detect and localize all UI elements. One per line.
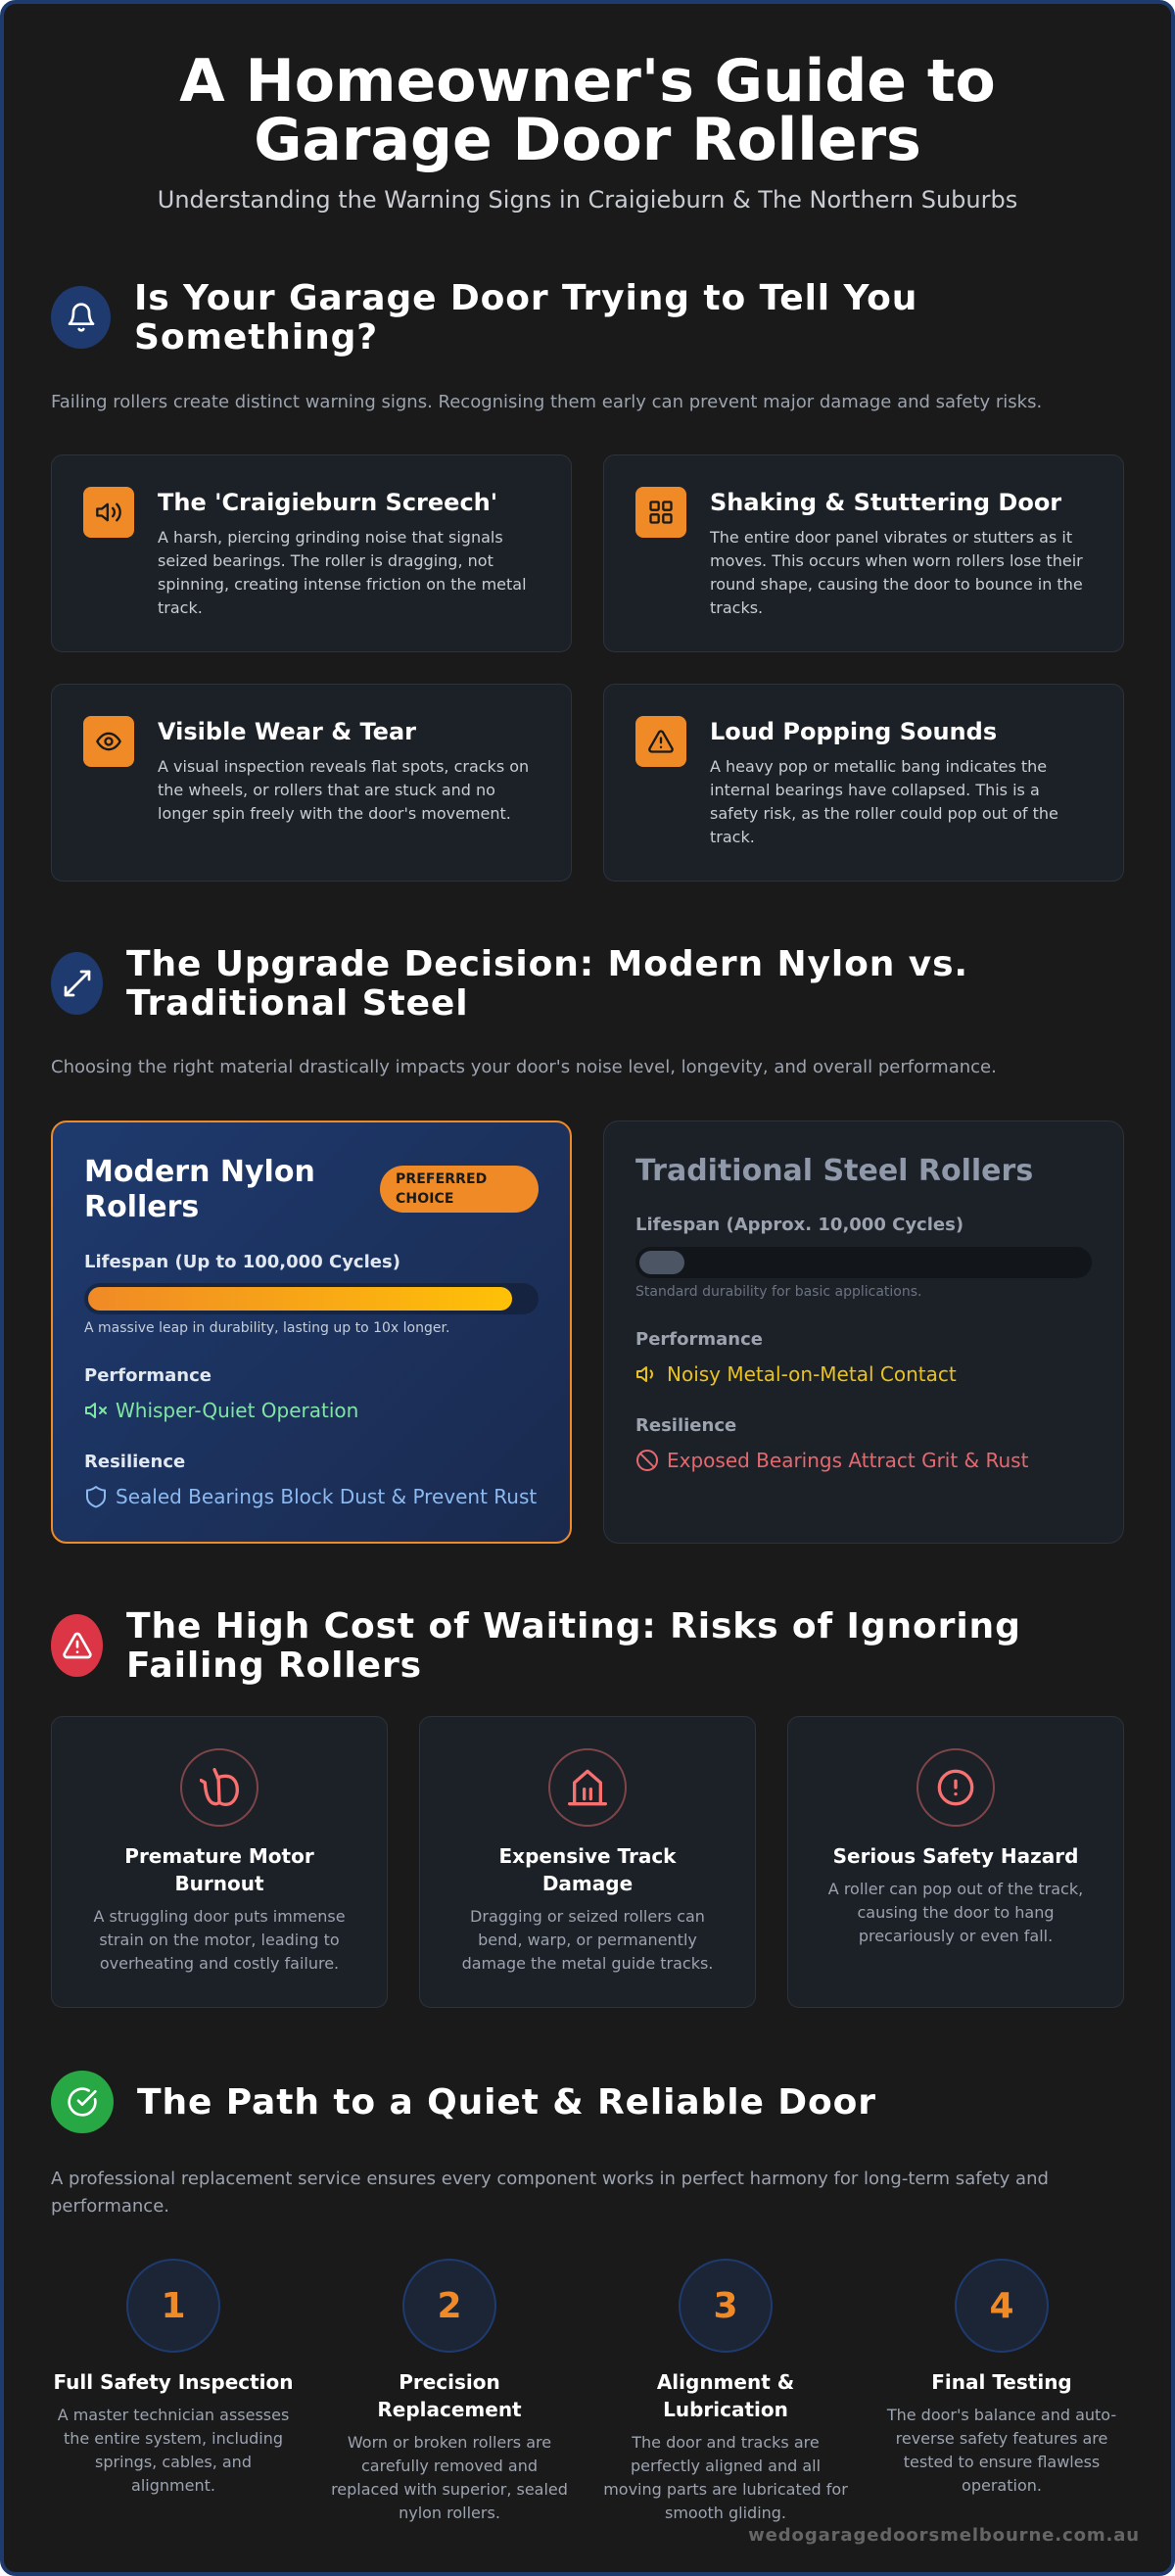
step text: A master technician assesses <box>58 2406 289 2424</box>
icon: speaker <box>636 1366 653 1382</box>
text <box>462 1907 713 1973</box>
step text: moving parts are lubricated for <box>603 2480 848 2499</box>
card text: internal bearings have collapsed. This is a <box>710 781 1040 799</box>
intro text: path <box>51 2169 1049 2217</box>
step text: operation. <box>962 2476 1042 2495</box>
icon: speaker <box>83 487 134 538</box>
panel title: Rollers <box>84 1190 199 1224</box>
section heading: upgrade decision <box>51 944 968 1024</box>
title: Premature Motor <box>124 1844 314 1868</box>
title: Garage Door Rollers <box>254 106 921 174</box>
label: lifespan: Lifespan (Approx. 10,000 Cycles) <box>635 1215 964 1235</box>
badge: preferred choice <box>380 1166 539 1213</box>
title <box>124 1844 314 1895</box>
step 4 <box>887 2259 1116 2495</box>
card text: safety risk, as the roller could pop out of the <box>710 804 1058 823</box>
subtitle: Understanding the Warning Signs in Craigieburn & The Northern Suburbs <box>158 186 1017 214</box>
number <box>955 2259 1049 2353</box>
header <box>158 47 1017 214</box>
title <box>499 1844 677 1895</box>
heading: The Path to a Quiet & Reliable Door <box>137 2082 876 2123</box>
step text: the entire system, including <box>64 2429 283 2448</box>
step text <box>57 2406 289 2495</box>
card text: tracks. <box>710 598 763 617</box>
text: bend, warp, or permanently <box>478 1931 697 1949</box>
card text: track. <box>158 598 203 617</box>
heading: The Upgrade Decision: Modern Nylon vs. <box>126 944 968 984</box>
heading <box>134 278 917 358</box>
intro text: path: performance. <box>51 2196 169 2217</box>
number: 1 <box>161 2286 186 2325</box>
heading: Traditional Steel <box>126 983 468 1024</box>
step text: The door's balance and auto- <box>887 2406 1116 2424</box>
card: Visible Wear <box>51 684 572 882</box>
icon: warning triangle <box>635 716 686 767</box>
label: lifespan: Lifespan (Up to 100,000 Cycles) <box>84 1252 400 1272</box>
step title: Precision <box>399 2370 500 2394</box>
risk card: track damage <box>419 1716 756 2008</box>
icon: check <box>51 2071 114 2133</box>
step title: Lubrication <box>663 2398 788 2421</box>
card: Loud Popping <box>603 684 1124 882</box>
card text: A visual inspection reveals flat spots, cracks on <box>158 757 529 776</box>
label: resilience: Resilience <box>84 1452 185 1472</box>
step text: reverse safety features are <box>896 2429 1107 2448</box>
value: noisy: Noisy Metal-on-Metal Contact <box>667 1362 957 1386</box>
note: Standard durability for basic applications. <box>635 1284 921 1300</box>
card: Shaking and Stuttering <box>603 454 1124 652</box>
heading <box>126 944 968 1024</box>
text: strain on the motor, leading to <box>99 1931 340 1949</box>
icon: muted speaker <box>85 1403 107 1418</box>
icon: ban <box>636 1450 658 1471</box>
number <box>126 2259 220 2353</box>
value: exposed: Exposed Bearings Attract Grit & Rust <box>667 1449 1028 1472</box>
section heading: cost of waiting <box>51 1606 1021 1686</box>
step text <box>331 2433 568 2522</box>
card text: round shape, causing the door to bounce in the <box>710 575 1083 594</box>
value: quiet: Whisper-Quiet Operation <box>116 1399 358 1422</box>
panel title: Traditional Steel Rollers <box>635 1154 1033 1188</box>
text: A struggling door puts immense <box>93 1907 346 1926</box>
step text: nylon rollers. <box>399 2504 500 2522</box>
heading: Is Your Garage Door Trying to Tell You <box>134 278 917 318</box>
card title: Shaking & Stuttering Door <box>710 489 1061 516</box>
section heading: warning signs <box>51 278 917 358</box>
step text: carefully removed and <box>361 2457 538 2475</box>
card title: Visible Wear & Tear <box>158 718 416 745</box>
card text: longer spin freely with the door's movement. <box>158 804 511 823</box>
bar fill <box>88 1287 512 1311</box>
panel title <box>84 1155 315 1224</box>
card text: seized bearings. The roller is dragging, not <box>158 551 494 570</box>
panel title: Modern Nylon <box>84 1155 315 1189</box>
card title: The 'Craigieburn Screech' <box>158 489 497 516</box>
text: causing the door to hang <box>857 1903 1055 1922</box>
text: Dragging or seized rollers can <box>470 1907 705 1926</box>
icon: bell <box>51 286 111 349</box>
heading: The High Cost of Waiting: Risks of Ignoring <box>126 1606 1021 1646</box>
label: resilience: Resilience <box>635 1415 736 1436</box>
text: damage the metal guide tracks. <box>462 1954 713 1973</box>
step text: tested to ensure flawless <box>904 2453 1100 2471</box>
step title: Replacement <box>377 2398 522 2421</box>
card text <box>710 757 1058 846</box>
card text <box>158 528 527 617</box>
number: 2 <box>437 2286 462 2325</box>
icon: diagonal arrow <box>51 952 103 1015</box>
text: A roller can pop out of the track, <box>828 1880 1083 1898</box>
icon: motor <box>180 1748 258 1827</box>
card text <box>158 757 529 823</box>
step text: replaced with superior, sealed <box>331 2480 568 2499</box>
title: Burnout <box>174 1872 264 1895</box>
card: Craigieburn Screech <box>51 454 572 652</box>
progress bar: 10,000 cycles <box>635 1247 1092 1278</box>
step 2 <box>331 2259 568 2522</box>
step 1 <box>53 2259 294 2495</box>
intro text: warning signs: Failing rollers create distinct warning signs. Recognising them early can prevent major damage and safety risks. <box>51 392 1042 412</box>
footer url: wedogaragedoorsmelbourne.com.au <box>748 2525 1140 2546</box>
card text: moves. This occurs when worn rollers lose their <box>710 551 1083 570</box>
text: precariously or even fall. <box>859 1927 1053 1945</box>
step text: The door and tracks are <box>632 2433 820 2452</box>
card title: Loud Popping Sounds <box>710 718 997 745</box>
heading <box>126 1606 1021 1686</box>
card text: track. <box>710 828 755 846</box>
risk card: safety hazard <box>787 1716 1124 2008</box>
section heading: path <box>51 2071 876 2133</box>
card text: The entire door panel vibrates or stutters as it <box>710 528 1072 547</box>
panel: nylon rollers <box>51 1121 572 1544</box>
title: Damage <box>542 1872 633 1895</box>
badge: preferred choice: PREFERRED <box>396 1171 487 1187</box>
card text: spinning, creating intense friction on the metal <box>158 575 527 594</box>
number: 4 <box>989 2286 1014 2325</box>
progress bar: 100,000 cycles <box>84 1283 539 1314</box>
step title <box>657 2370 794 2421</box>
step text: alignment. <box>131 2476 215 2495</box>
number: 3 <box>713 2286 738 2325</box>
title: Expensive Track <box>499 1844 676 1868</box>
step text: perfectly aligned and all <box>631 2457 821 2475</box>
step text: springs, cables, and <box>95 2453 252 2471</box>
number <box>402 2259 496 2353</box>
badge: preferred choice: CHOICE <box>396 1191 454 1207</box>
value: sealed: Sealed Bearings Block Dust & Prevent Rust <box>116 1485 537 1508</box>
step text <box>887 2406 1116 2495</box>
icon: alert circle <box>916 1748 995 1827</box>
label: performance: Performance <box>84 1365 212 1386</box>
step text <box>603 2433 848 2522</box>
card text: the wheels, or rollers that are stuck and no <box>158 781 495 799</box>
number <box>679 2259 773 2353</box>
title: A Homeowner's Guide to <box>179 47 996 116</box>
step title: Alignment & <box>657 2370 794 2394</box>
intro text: upgrade: Choosing the right material drastically impacts your door's noise level, longevity, and overall performance. <box>51 1057 997 1077</box>
text <box>93 1907 346 1973</box>
intro text: path: A professional replacement service ensures every component works in perfect harmony for long-term safety and <box>51 2169 1049 2189</box>
icon: eye <box>83 716 134 767</box>
step text: smooth gliding. <box>665 2504 786 2522</box>
card text: A harsh, piercing grinding noise that signals <box>158 528 503 547</box>
panel: steel rollers <box>603 1121 1124 1544</box>
step text: Worn or broken rollers are <box>348 2433 551 2452</box>
step title <box>377 2370 522 2421</box>
text: overheating and costly failure. <box>100 1954 339 1973</box>
icon: shield <box>86 1486 106 1508</box>
title: Serious Safety Hazard <box>833 1844 1078 1868</box>
note: A massive leap in durability, lasting up to 10x longer. <box>84 1320 449 1336</box>
bar fill <box>639 1251 684 1274</box>
step title: Full Safety Inspection <box>53 2370 294 2394</box>
heading: Something? <box>134 317 378 358</box>
icon: warning <box>51 1614 103 1677</box>
step title: Final Testing <box>931 2370 1072 2394</box>
risk card: motor burnout <box>51 1716 388 2008</box>
card text: A heavy pop or metallic bang indicates the <box>710 757 1047 776</box>
label: performance: Performance <box>635 1329 763 1350</box>
icon: warehouse <box>548 1748 627 1827</box>
title <box>179 47 996 174</box>
heading: Failing Rollers <box>126 1646 422 1686</box>
text <box>828 1880 1083 1945</box>
step 3 <box>603 2259 848 2522</box>
card text <box>709 528 1083 617</box>
icon: grid <box>635 487 686 538</box>
